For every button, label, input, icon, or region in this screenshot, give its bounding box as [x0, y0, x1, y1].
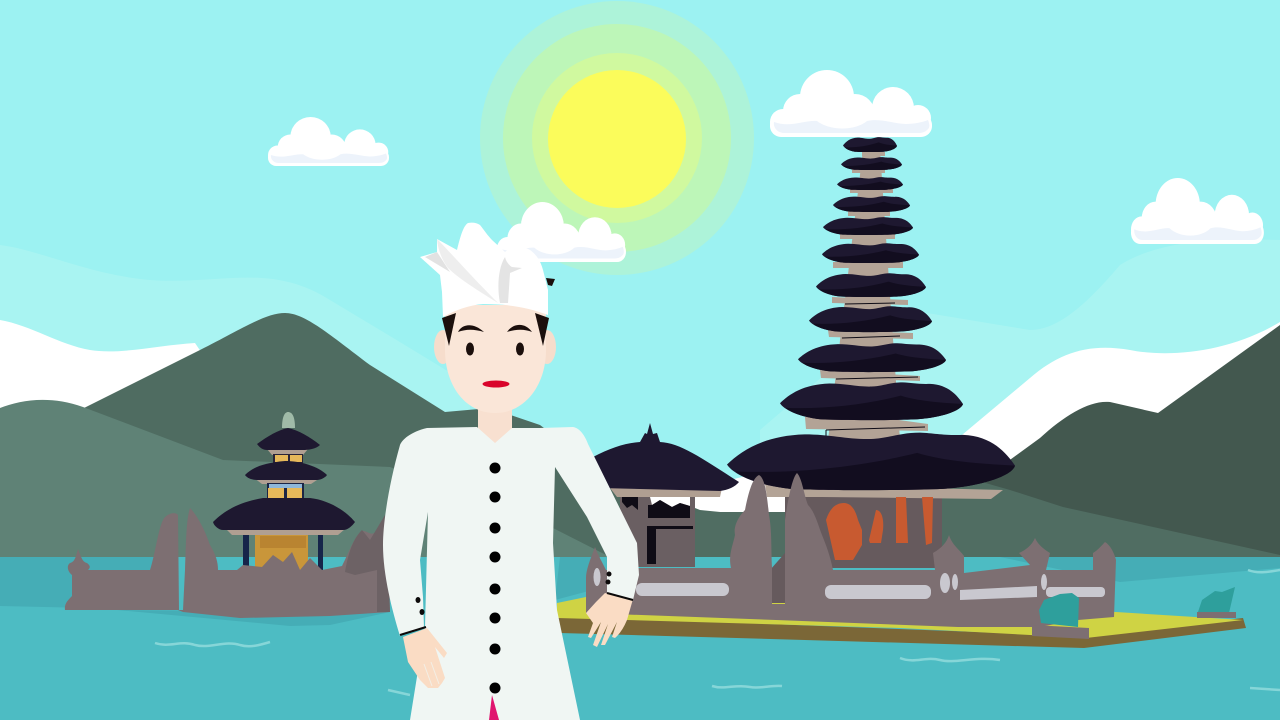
left temple: posts	[243, 535, 323, 577]
white wall panels	[594, 568, 1105, 600]
right temple	[586, 137, 1236, 639]
left temple: wall and gates	[65, 508, 390, 618]
man: left hand	[403, 628, 447, 688]
cloud: upper left	[268, 117, 389, 166]
man: pink sash	[489, 695, 499, 720]
left temple: beams	[226, 449, 345, 535]
man: cuff buttons	[416, 572, 612, 615]
man: left finger lines	[424, 662, 439, 686]
small teal statue	[1198, 587, 1235, 613]
left temple	[65, 412, 390, 618]
main tower roofs	[780, 137, 963, 420]
island top	[557, 597, 1243, 638]
left temple: panel	[260, 536, 306, 548]
man: hat ornament	[546, 278, 555, 286]
man: eyebrows	[458, 325, 532, 332]
water ripples	[155, 570, 1280, 695]
distant pale hills	[0, 239, 1280, 560]
main tower base beam	[765, 484, 1003, 499]
lake shading	[0, 557, 1280, 626]
small pavilion body	[620, 497, 695, 567]
small pavilion beam	[610, 488, 722, 497]
man: neck	[478, 405, 512, 447]
mountain: right dark range	[985, 325, 1280, 556]
small pavilion roof	[588, 423, 739, 491]
man: left sleeve	[383, 428, 450, 636]
dark gate backing	[767, 553, 785, 603]
man: hair	[442, 313, 549, 346]
cloud: right	[1131, 178, 1264, 244]
orange shrine panels	[826, 497, 933, 560]
man: right hand	[586, 593, 633, 647]
man: coat buttons	[490, 462, 500, 694]
left temple: roofs	[213, 428, 355, 530]
big teal statue	[1039, 593, 1079, 627]
left temple: body	[255, 535, 308, 572]
man: cuffs	[400, 593, 633, 635]
man: coat body	[410, 427, 580, 720]
left temple: finial	[282, 412, 295, 428]
man: headdress	[420, 223, 548, 317]
man: eyes	[466, 342, 524, 356]
left temple: dark gate back	[345, 515, 390, 612]
small pavilion openings	[622, 497, 693, 564]
small statue plinth	[1197, 612, 1236, 618]
main tower beams	[805, 152, 928, 431]
lake	[0, 557, 1280, 720]
man	[383, 223, 639, 720]
big statue plinth	[1032, 625, 1089, 639]
snow fields	[0, 320, 1280, 516]
main wall	[586, 473, 1116, 627]
main tower body	[785, 495, 942, 568]
cloud: behind hat	[497, 202, 626, 262]
main tower base roof	[727, 433, 1015, 490]
man: lips	[482, 380, 510, 388]
left temple: windows	[267, 454, 304, 500]
cloud: above pagoda	[770, 70, 932, 137]
main tower beam shadows	[826, 303, 925, 440]
mountain: left peak	[0, 313, 1280, 560]
mountain: left foreground hill	[0, 400, 612, 558]
island side	[558, 616, 1246, 648]
sun	[480, 1, 754, 275]
main tower trunk	[828, 150, 900, 440]
man: headdress folds	[425, 239, 522, 303]
mountain: right mid band	[690, 470, 1280, 560]
man: right sleeve	[540, 427, 639, 600]
man: ears	[434, 330, 556, 364]
small pavilion white gap	[650, 497, 690, 507]
man: face	[445, 305, 546, 413]
